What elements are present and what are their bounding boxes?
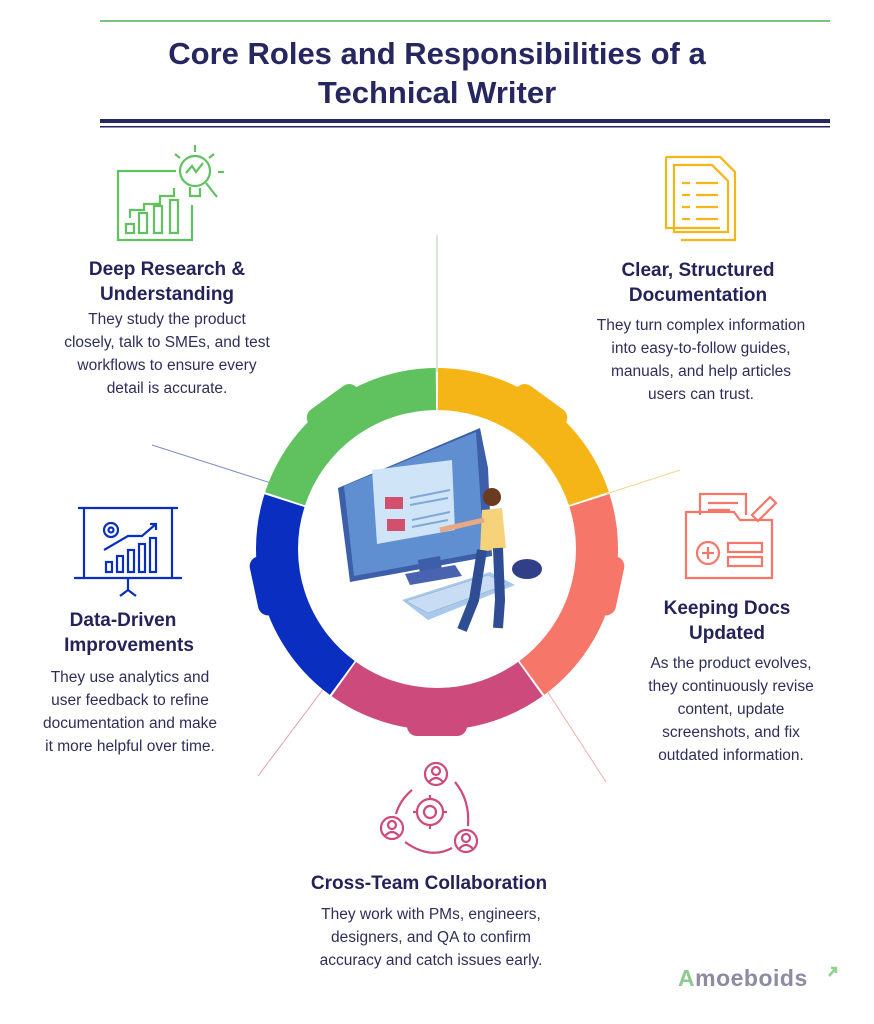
heading: Cross-Team Collaboration — [311, 873, 547, 894]
text block: closely, talk to SMEs, and test — [64, 334, 270, 351]
text block: screenshots, and fix — [662, 724, 800, 741]
leader lines — [152, 235, 680, 782]
text block: user feedback to refine — [51, 692, 209, 709]
icon: team gear — [381, 763, 477, 853]
text block: They turn complex information — [597, 317, 805, 334]
panel: keeping docs updated — [648, 494, 814, 764]
text block: As the product evolves, — [650, 655, 812, 672]
heading: Keeping Docs — [664, 598, 790, 619]
panel: documentation — [597, 157, 805, 403]
panel: deep research — [64, 145, 270, 397]
title: Technical Writer — [318, 75, 556, 110]
text block: They work with PMs, engineers, — [321, 906, 541, 923]
text block: designers, and QA to confirm — [331, 929, 531, 946]
panel: deep research: Understanding — [100, 284, 234, 305]
title — [168, 36, 706, 110]
panel: collaboration — [311, 763, 547, 969]
text block: They study the product — [88, 311, 247, 328]
text block: it more helpful over time. — [45, 738, 215, 755]
illustration: writer at computer — [338, 428, 542, 630]
text block: accuracy and catch issues early. — [320, 952, 542, 969]
text block: detail is accurate. — [107, 380, 227, 397]
ring — [213, 325, 661, 773]
panel: data-driven: Improvements — [64, 635, 194, 656]
icon: presentation board with chart — [74, 508, 182, 596]
title: Core Roles and Responsibilities of a — [168, 36, 706, 71]
icon: folder with documents and pencil — [686, 494, 776, 578]
icon: documents — [666, 157, 735, 240]
text block: manuals, and help articles — [611, 363, 791, 380]
text block: content, update — [678, 701, 784, 718]
text block: documentation and make — [43, 715, 217, 732]
panel: data-driven — [43, 508, 217, 755]
text block — [648, 655, 814, 764]
text block: They use analytics and — [51, 669, 209, 686]
text block — [64, 311, 270, 397]
text block — [597, 317, 805, 403]
text block: users can trust. — [648, 386, 754, 403]
heading: Deep Research & — [89, 259, 245, 280]
heading: Clear, Structured — [621, 260, 775, 281]
text block: into easy-to-follow guides, — [611, 340, 791, 357]
heading: Data-Driven — [70, 610, 176, 631]
icon: research chart with magnifier bulb — [118, 145, 224, 240]
panel: documentation: Documentation — [629, 285, 767, 306]
panel: keeping docs updated: Updated — [689, 623, 765, 644]
text block: they continuously revise — [648, 678, 814, 695]
text block: outdated information. — [658, 747, 804, 764]
text block — [320, 906, 542, 969]
text block: workflows to ensure every — [76, 357, 257, 374]
text block — [43, 669, 217, 755]
logo: Amoeboids: Amoeboids — [678, 965, 808, 991]
